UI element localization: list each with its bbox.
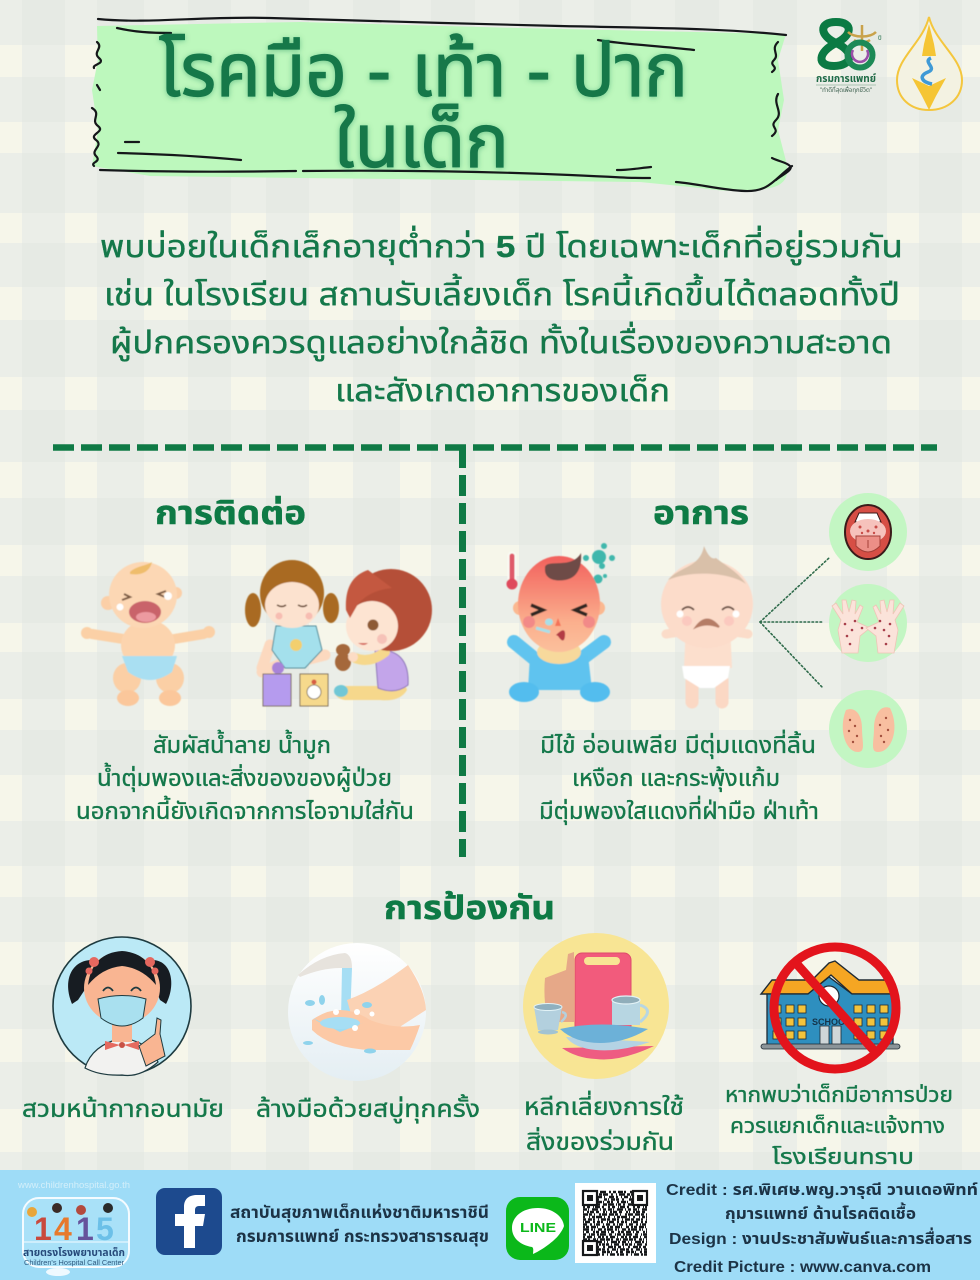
logo: 1415 call center: 1 [76, 1211, 94, 1247]
intro paragraph: เช่น ในโรงเรียน สถานรับเลี้ยงเด็ก โรคนี้เกิดขึ้นได้ตลอดทั้งปี [104, 273, 900, 312]
heading: symptoms: อาการ [653, 494, 749, 531]
logo: Department of Medical Services 80 years: "ทำดีที่สุดเพื่อทุกชีวิต" [820, 85, 872, 94]
title text: ในเด็ก [334, 100, 509, 183]
title text: โรคมือ - เท้า - ปาก [159, 29, 688, 112]
captions: prevention: โรงเรียนทราบ [772, 1146, 914, 1169]
caption: transmission [76, 729, 414, 824]
logo: Department of Medical Services 80 years: ปี [878, 35, 882, 42]
QR code [575, 1183, 656, 1263]
logo: Department of Medical Services 80 years: กรมการแพทย์ [816, 73, 876, 85]
captions: prevention: สิ่งของร่วมกัน [526, 1126, 674, 1156]
panel: symptoms [506, 493, 907, 825]
title text [159, 29, 688, 183]
credits [666, 1182, 978, 1276]
credits: กุมารแพทย์ ด้านโรคติดเชื้อ [725, 1202, 916, 1223]
illustration: feverish baby [506, 543, 615, 702]
logo: 1415 call center: สายตรงโรงพยาบาลเด็ก [23, 1247, 125, 1259]
footer band [0, 1170, 980, 1280]
icon: hands with spots [829, 584, 907, 662]
icon: LINE: LINE [520, 1220, 556, 1235]
logo: Department of Medical Services 80 years [816, 22, 882, 94]
caption: symptoms: มีตุ่มพองใสแดงที่ฝ่ามือ ฝ่าเท้า [539, 795, 819, 825]
logo: 1415 call center: Children's Hospital Call Center [24, 1260, 125, 1267]
captions: prevention: ควรแยกเด็กและแจ้งทาง [730, 1113, 945, 1138]
icon: hand washing [288, 943, 426, 1081]
text: institute name: สถาบันสุขภาพเด็กแห่งชาติมหาราชินี [230, 1202, 489, 1223]
icon: facebook [156, 1188, 222, 1255]
caption: symptoms: เหงือก และกระพุ้งแก้ม [572, 765, 780, 792]
heading: transmission: การติดต่อ [155, 494, 306, 531]
caption: symptoms: มีไข้ อ่อนเพลีย มีตุ่มแดงที่ลิ้น [540, 729, 816, 759]
icon: feet with spots [829, 690, 907, 768]
illustration: crying baby [81, 562, 215, 706]
dashed dividers [53, 447, 937, 857]
icon: school prohibited [761, 947, 900, 1069]
logo: Ministry of Public Health teardrop [897, 17, 962, 110]
banner: green torn paper [92, 22, 787, 191]
icon: kitchenware [523, 933, 669, 1079]
caption: transmission: นอกจากนี้ยังเกิดจากการไอจามใส่กัน [76, 795, 414, 824]
credits: Credit Picture : www.canva.com [674, 1259, 931, 1276]
banner: hand-drawn strokes [92, 18, 792, 191]
text: institute name: กรมการแพทย์ กระทรวงสาธารณสุข [236, 1227, 489, 1247]
panel: prevention [22, 889, 953, 1169]
logo: 1415 call center: www.childrenhospital.go.th [17, 1180, 130, 1190]
caption: symptoms [539, 729, 819, 825]
intro paragraph: ผู้ปกครองควรดูแลอย่างใกล้ชิด ทั้งในเรื่องของความสะอาด [110, 321, 892, 361]
logo: 1415 call center: 1 [34, 1211, 52, 1247]
text: institute name [230, 1202, 489, 1247]
captions: prevention: หากพบว่าเด็กมีอาการป่วย [725, 1082, 953, 1107]
icon: girl wearing a mask [53, 937, 191, 1075]
intro paragraph: และสังเกตอาการของเด็ก [335, 373, 670, 408]
dotted leader lines [760, 558, 829, 687]
captions: prevention: สวมหน้ากากอนามัย [22, 1096, 224, 1123]
icon: tongue with spots [829, 493, 907, 571]
illustration: children playing [245, 560, 432, 706]
heading: prevention: การป้องกัน [384, 889, 555, 926]
illustration: crying infant [661, 546, 753, 702]
title banner [92, 18, 792, 191]
icon: LINE [506, 1197, 569, 1260]
captions: prevention: หลีกเลี่ยงการใช้ [524, 1090, 684, 1121]
captions: prevention: ล้างมือด้วยสบู่ทุกครั้ง [256, 1093, 480, 1124]
caption: transmission: สัมผัสน้ำลาย น้ำมูก [153, 729, 331, 760]
credits: Design : งานประชาสัมพันธ์และการสื่อสาร [669, 1227, 972, 1248]
icon: school prohibited: SCHOOL [812, 1017, 851, 1027]
captions: prevention [22, 1082, 953, 1169]
panel: transmission [76, 494, 432, 824]
logo: 1415 call center [17, 1180, 130, 1276]
logo: 1415 call center: 5 [96, 1211, 114, 1247]
intro paragraph: พบบ่อยในเด็กเล็กอายุต่ำกว่า 5 ปี โดยเฉพาะเด็กที่อยู่รวมกัน [100, 225, 903, 265]
logo: 1415 call center: 4 [54, 1211, 72, 1247]
credits: Credit : รศ.พิเศษ.พญ.วารุณี วานเดอพิทท์ [666, 1182, 978, 1199]
caption: transmission: น้ำตุ่มพองและสิ่งของของผู้ป่วย [97, 762, 392, 793]
intro paragraph [100, 225, 903, 408]
